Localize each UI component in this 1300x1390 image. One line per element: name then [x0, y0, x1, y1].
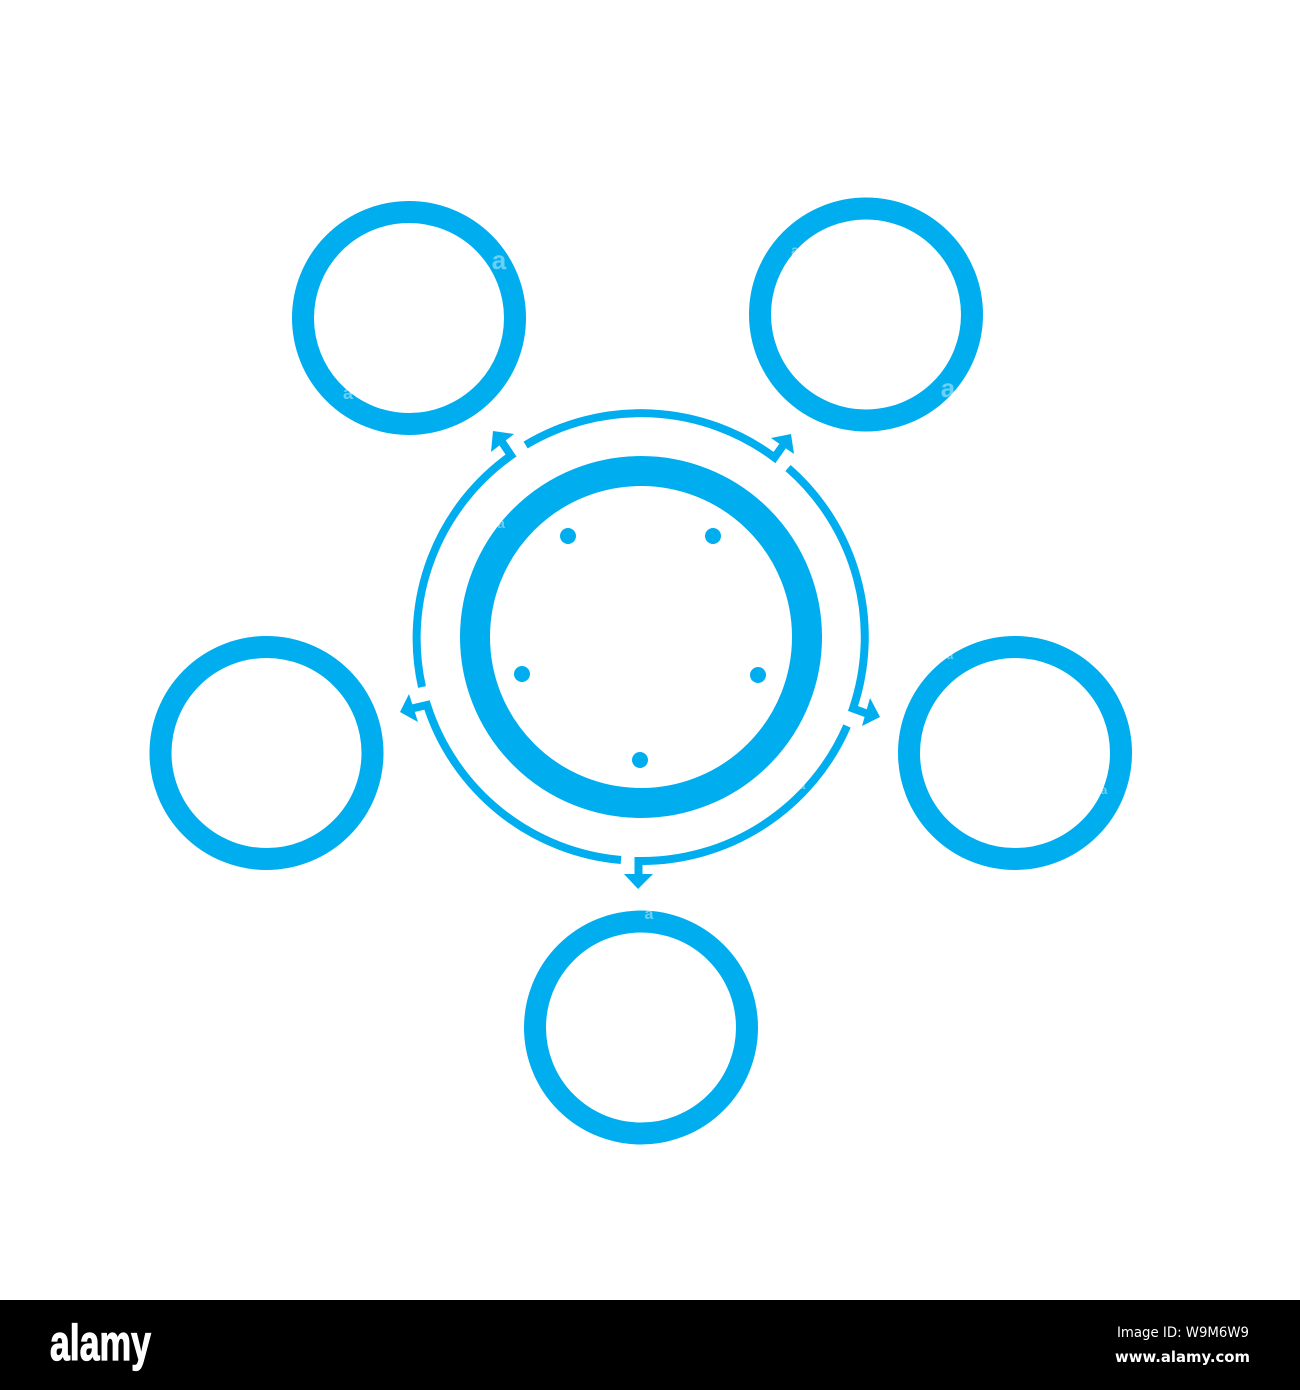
- arrow: top left: [417, 431, 514, 687]
- faint watermark marks: a: [947, 648, 954, 662]
- arrow: right: [788, 468, 880, 726]
- hub dots: [514, 528, 766, 768]
- satellite ring: bottom: [535, 922, 747, 1134]
- arrow: top right: [526, 413, 794, 458]
- satellite ring: top left: [303, 212, 515, 424]
- arrow: bottom: [624, 726, 847, 889]
- faint watermark marks: a: [1101, 783, 1108, 797]
- footer url: www.alamy.com: [1115, 1348, 1250, 1366]
- satellite ring: left: [160, 647, 372, 859]
- faint watermark marks: a: [941, 373, 956, 403]
- faint watermark marks: a: [791, 242, 799, 258]
- faint watermark marks: a: [343, 383, 354, 403]
- faint watermark marks: [343, 242, 1108, 923]
- satellite ring: right: [909, 647, 1121, 859]
- footer bar: [0, 1300, 1300, 1390]
- faint watermark marks: a: [492, 245, 507, 275]
- faint watermark marks: a: [645, 906, 654, 923]
- footer logo: alamy: [50, 1315, 151, 1371]
- faint watermark marks: a: [497, 515, 505, 531]
- arrow: left: [400, 694, 621, 860]
- footer image id: Image ID: W9M6W9: [1117, 1325, 1249, 1341]
- satellite ring: top right: [760, 208, 972, 420]
- central hub ring: [475, 471, 807, 803]
- faint watermark marks: a: [799, 778, 806, 792]
